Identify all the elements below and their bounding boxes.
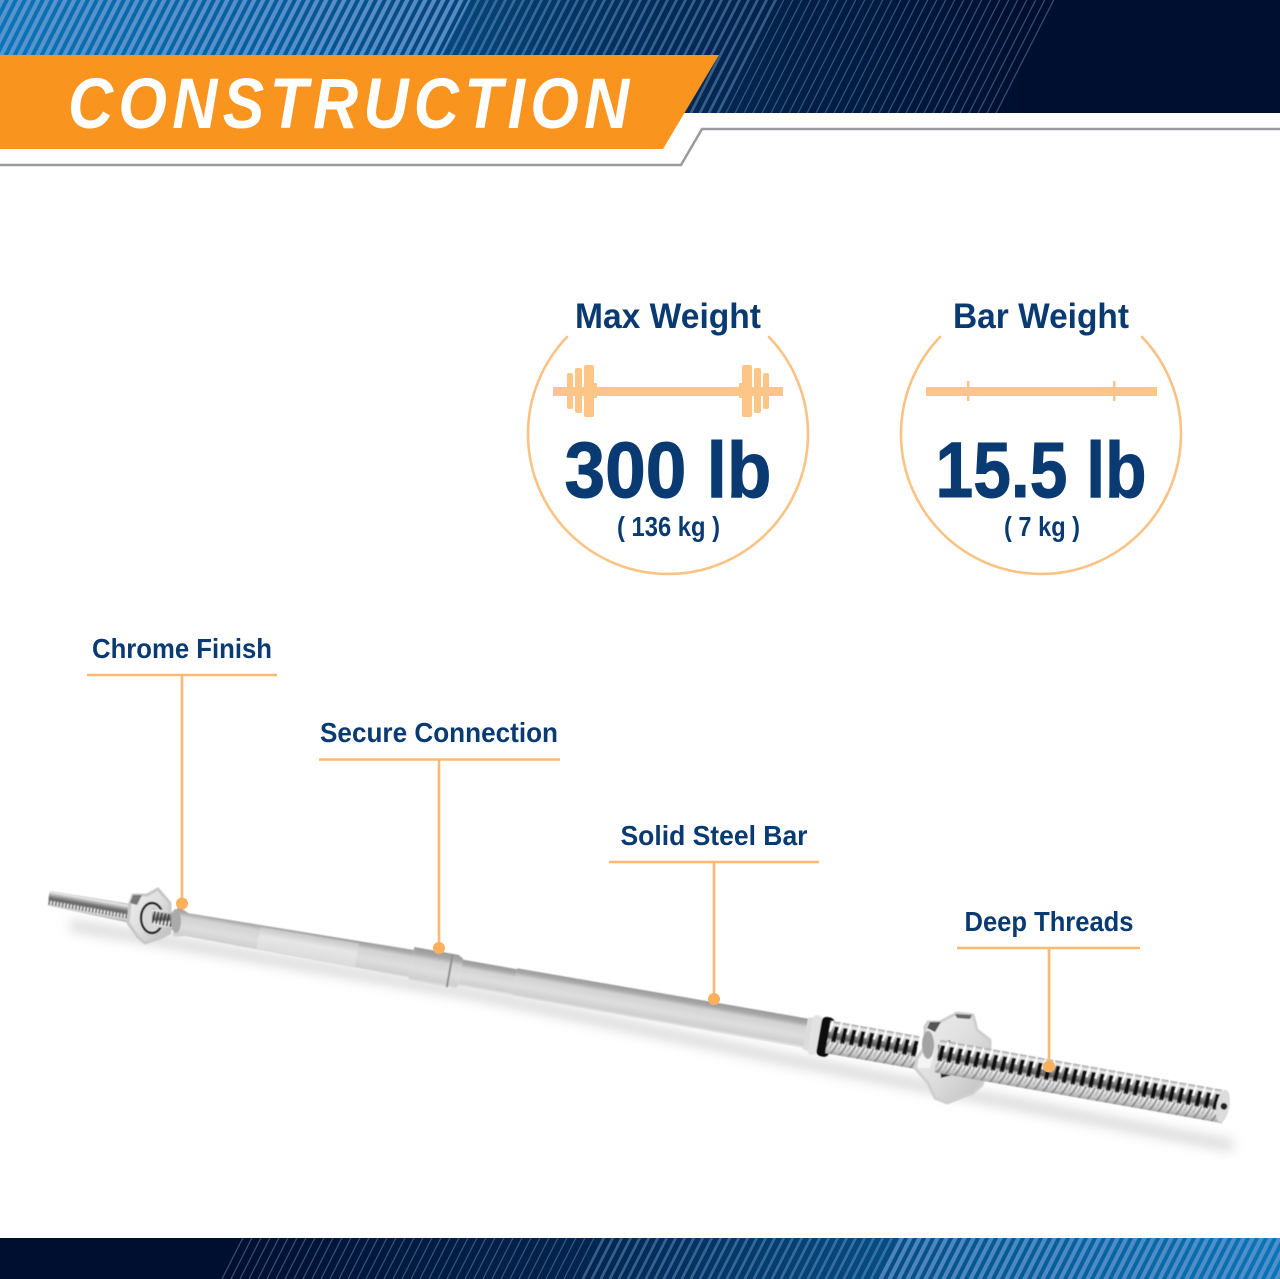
stat: max weight (528, 297, 808, 574)
icon: empty bar (926, 381, 1157, 401)
title banner (0, 55, 719, 149)
footer band (0, 1238, 1280, 1279)
left spin-lock collar (128, 889, 181, 943)
stat: max weight: ( 136 kg ) (617, 511, 720, 542)
stat: max weight: 300 lb (564, 425, 772, 514)
callout: solid steel bar (609, 820, 819, 1005)
callout: chrome finish (87, 633, 277, 910)
right deep thread (934, 1039, 1232, 1124)
callout: secure connection: Secure Connection (320, 717, 558, 748)
right spin-lock collar (915, 1013, 990, 1103)
callout: chrome finish: Chrome Finish (92, 633, 272, 664)
right collar, ring and inner thread (807, 1015, 920, 1073)
header banner background (0, 0, 1280, 113)
stat: bar weight: 15.5 lb (936, 425, 1146, 514)
stat: max weight: Max Weight (575, 297, 761, 336)
stat: bar weight: ( 7 kg ) (1004, 511, 1080, 542)
header outline stroke (0, 129, 1280, 165)
barbell product illustration (45, 881, 1233, 1146)
bar shadow (70, 925, 1233, 1146)
stat: bar weight: Bar Weight (953, 297, 1129, 336)
title banner: CONSTRUCTION (68, 64, 635, 144)
callout: secure connection (319, 717, 560, 954)
callout: deep threads (957, 906, 1140, 1072)
stat: bar weight (901, 297, 1181, 574)
callout: solid steel bar: Solid Steel Bar (620, 820, 808, 851)
icon: loaded barbell (553, 365, 783, 417)
left thread and shaft (45, 881, 822, 1055)
callout: deep threads: Deep Threads (964, 906, 1134, 937)
